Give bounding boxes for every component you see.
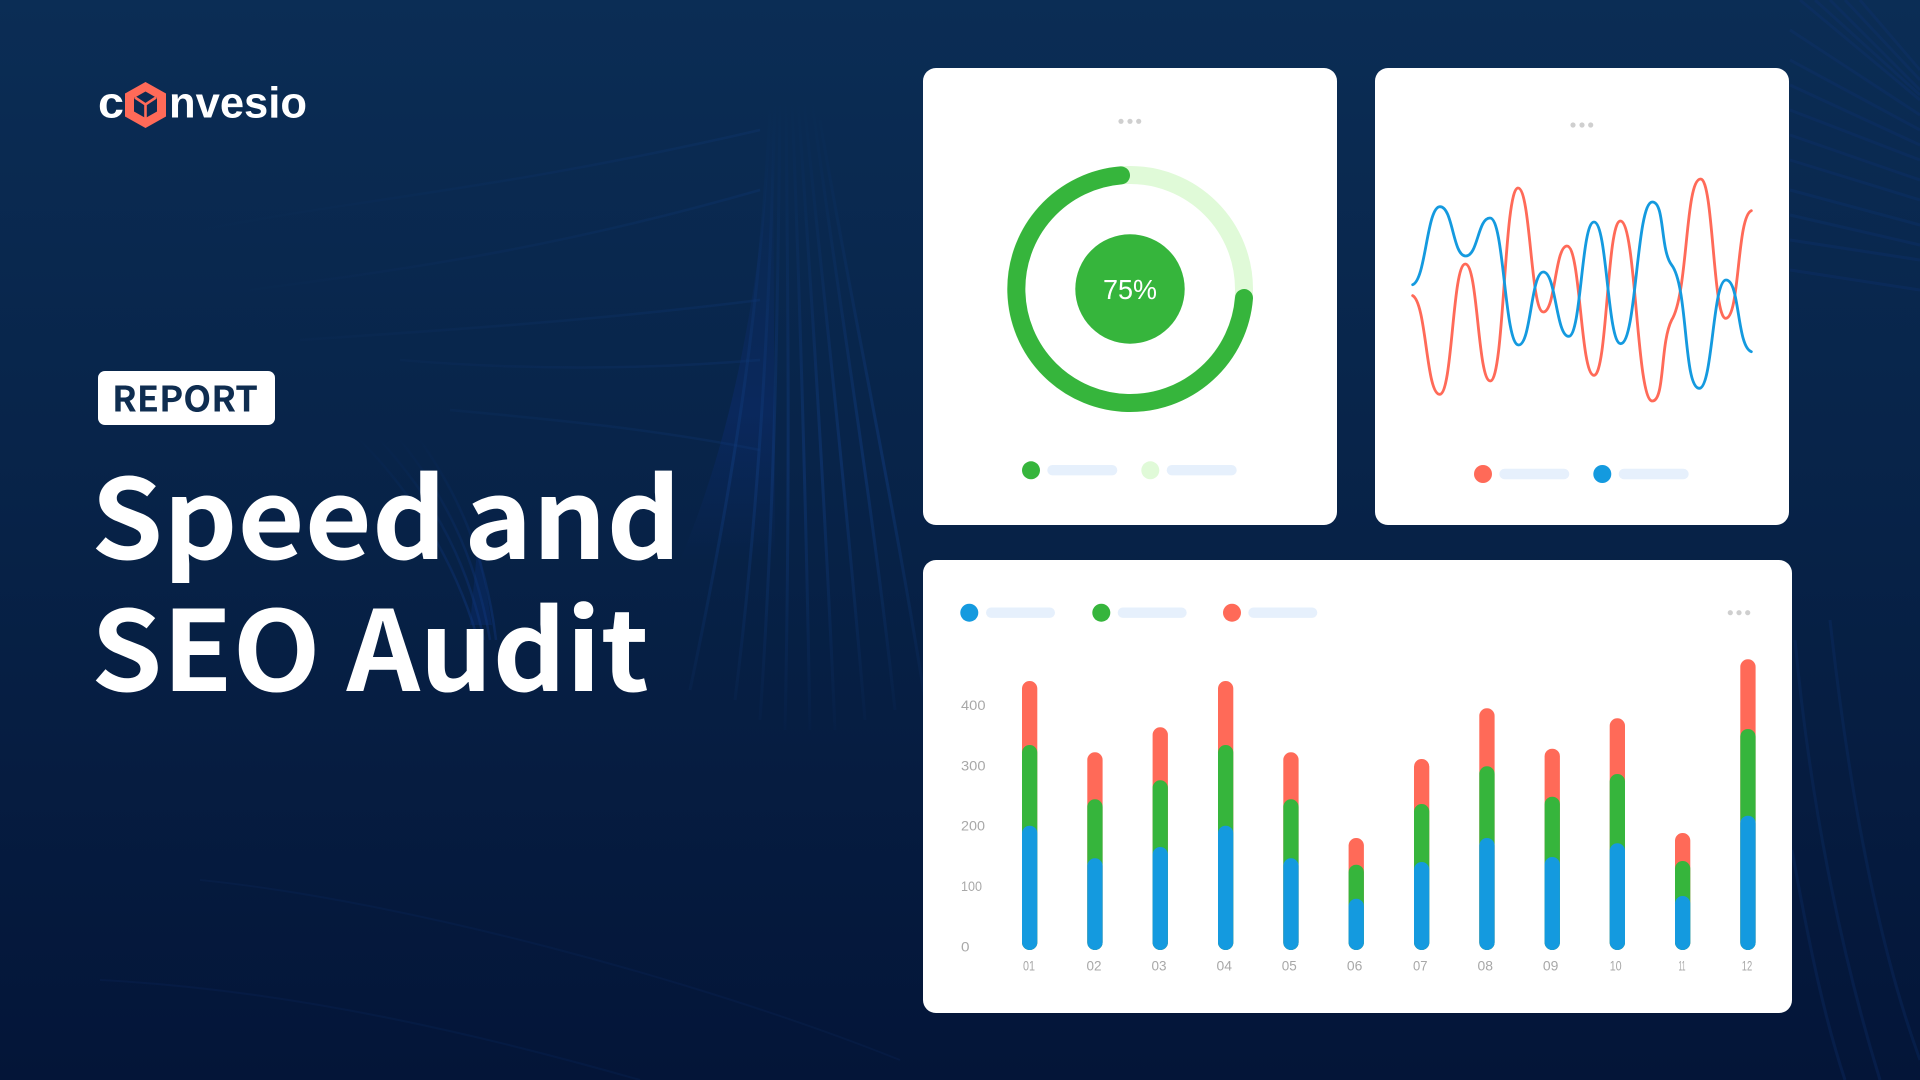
x axis labels: 03: [1152, 958, 1166, 973]
line chart: [1413, 179, 1751, 401]
center value: [1075, 234, 1185, 344]
title: SEO Audit: [91, 562, 649, 723]
bars: [1022, 659, 1756, 950]
y axis labels: 0: [961, 939, 970, 954]
badge: report: REPORT: [112, 372, 258, 422]
legend: [1474, 465, 1689, 483]
panel: donut chart: [923, 68, 1337, 525]
legend: [960, 604, 1317, 622]
bar 09: [1545, 749, 1560, 950]
x axis labels: 02: [1086, 958, 1102, 973]
y axis labels: [961, 698, 986, 954]
icon: hexagon cube: [125, 82, 166, 128]
center value: 75%: [1103, 274, 1157, 305]
x axis labels: 09: [1543, 958, 1558, 973]
bar 03: [1153, 727, 1168, 950]
x axis labels: [1023, 958, 1752, 973]
bar 04: [1218, 681, 1233, 950]
x axis labels: 01: [1023, 958, 1035, 973]
x axis labels: 05: [1282, 958, 1297, 973]
logo: [98, 78, 307, 128]
bar 10: [1610, 718, 1625, 950]
bar 07: [1414, 759, 1429, 950]
x axis labels: 04: [1217, 958, 1233, 973]
x axis labels: 12: [1742, 958, 1752, 973]
x axis labels: 07: [1413, 958, 1428, 973]
menu dots: [1570, 122, 1593, 128]
bar 06: [1349, 838, 1364, 950]
x axis labels: 11: [1678, 958, 1686, 973]
bar 05: [1283, 752, 1299, 950]
y axis labels: 100: [961, 879, 982, 894]
panel: wave line chart: [1375, 68, 1789, 525]
logo letter c: c: [98, 78, 124, 128]
bar 02: [1087, 752, 1103, 950]
y axis labels: 300: [961, 758, 986, 773]
title: [91, 430, 681, 723]
x axis labels: 06: [1347, 958, 1362, 973]
title: Speed and: [91, 430, 681, 591]
legend: [1022, 461, 1237, 479]
menu dots: [1118, 119, 1141, 124]
y axis labels: 200: [961, 819, 985, 834]
panel: stacked bar chart: [923, 560, 1792, 1013]
donut progress ring: [1016, 175, 1244, 403]
bar 11: [1675, 833, 1690, 950]
menu dots: [1728, 610, 1750, 615]
x axis labels: 08: [1478, 958, 1493, 973]
logo letters nvesio: nvesio: [169, 78, 307, 128]
y axis labels: 400: [961, 698, 986, 713]
x axis labels: 10: [1610, 958, 1622, 973]
bar 08: [1479, 708, 1495, 950]
bar 12: [1740, 659, 1756, 950]
bar 01: [1022, 681, 1037, 950]
